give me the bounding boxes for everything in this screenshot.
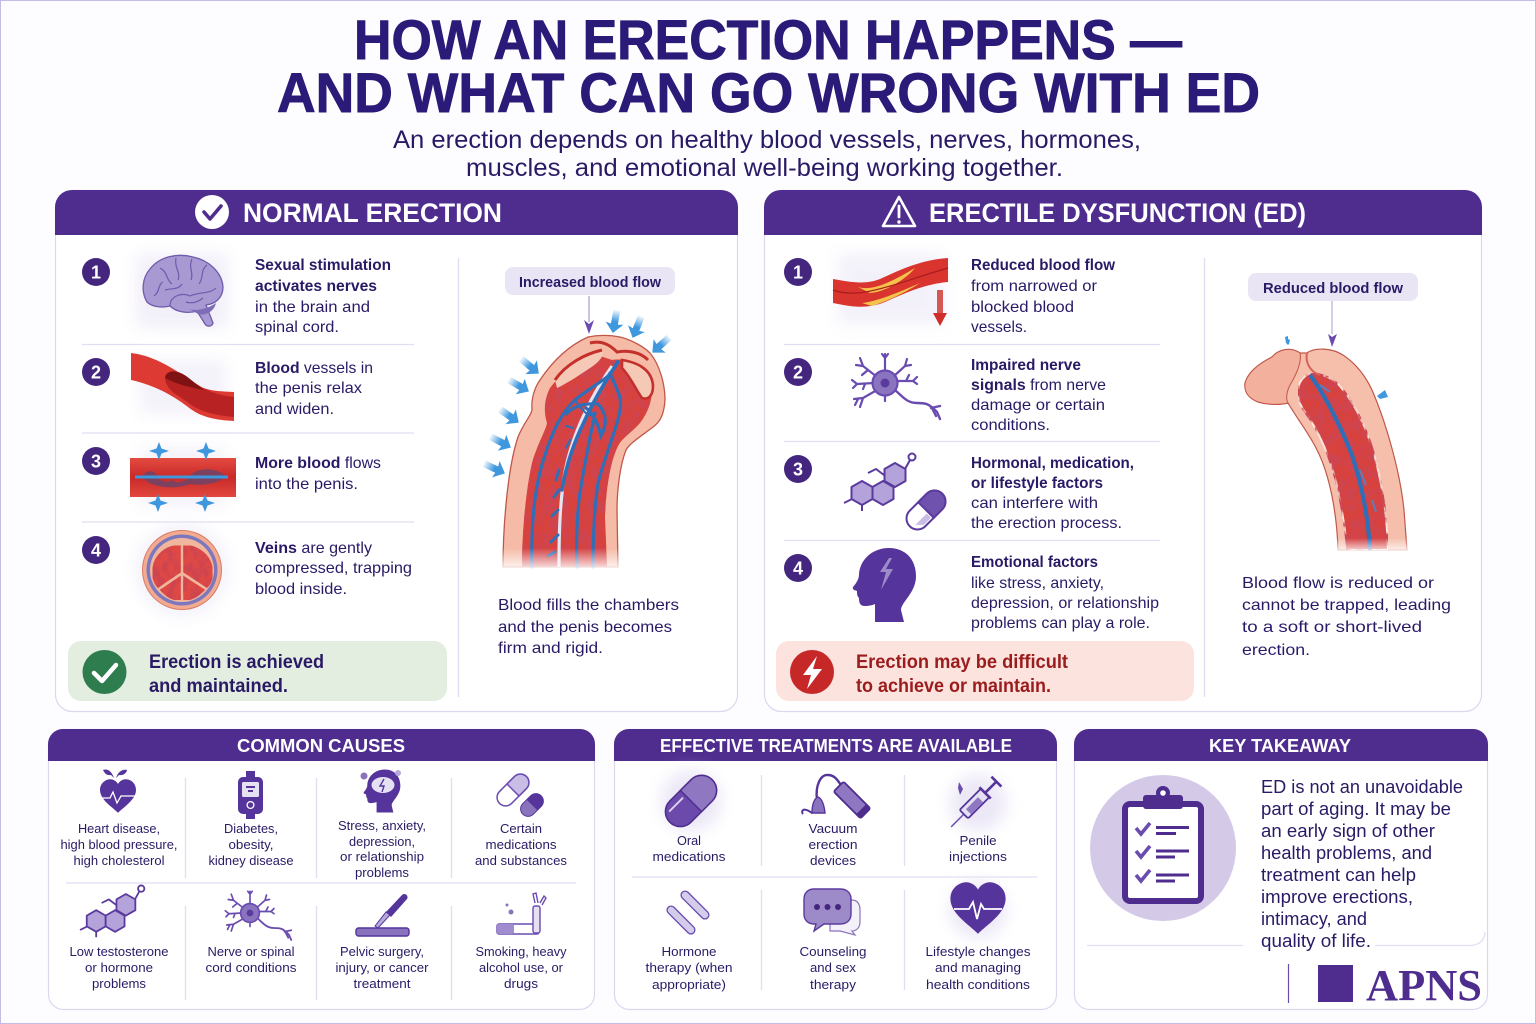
key takeaway text: part of aging. It may be (1261, 799, 1451, 819)
callout: erection difficult: Erection may be difficult (856, 652, 1069, 673)
panel header: ED: ERECTILE DYSFUNCTION (ED) (929, 198, 1306, 228)
cause: smoking and alcohol (476, 893, 567, 991)
title (277, 8, 1260, 124)
key takeaway text: treatment can help (1261, 865, 1416, 885)
arrows: sparse flow (1285, 301, 1388, 399)
caption: ED: erection. (1242, 642, 1310, 659)
step 4: cross-section: blood inside. (255, 581, 347, 598)
step 2: neuron (784, 354, 1106, 434)
callout: erection difficult (776, 641, 1194, 701)
logo: APNS (1288, 961, 1482, 1010)
treatment: lifestyle: health conditions (926, 978, 1030, 992)
cause: medications: and substances (475, 854, 567, 868)
label pill: reduced blood flow: Reduced blood flow (1263, 280, 1403, 297)
callout: erection difficult: to achieve or maintain. (856, 676, 1051, 697)
cause: smoking and alcohol: Smoking, heavy (476, 945, 567, 959)
step 2: widened vessel (82, 353, 373, 421)
cause: medications (475, 771, 567, 868)
step 2: neuron: signals from nerve (971, 377, 1106, 394)
label pill: increased blood flow: Increased blood flow (519, 274, 661, 291)
treatment: oral medications: medications (652, 850, 726, 864)
caption: ED: cannot be trapped, leading (1242, 597, 1451, 614)
cause: nerve conditions: cord conditions (206, 961, 296, 975)
treatment: oral medications: Oral (677, 834, 701, 848)
treatment: hormone therapy: Hormone (662, 945, 717, 959)
logo: APNS: APNS (1366, 961, 1482, 1010)
treatment: vacuum device: devices (810, 854, 856, 868)
step 4: head with stress bolt: problems can play a role. (971, 615, 1150, 632)
header: common causes: COMMON CAUSES (237, 735, 405, 756)
panel: erectile dysfunction (764, 190, 1482, 712)
cause: low testosterone (70, 885, 169, 991)
step 3: more blood flow: 3 (91, 452, 101, 472)
cause: smoking and alcohol: alcohol use, or (479, 961, 563, 975)
cause: smoking and alcohol: drugs (504, 977, 538, 991)
header: common causes (48, 729, 595, 761)
subtitle: muscles, and emotional well-being working together. (466, 154, 1063, 182)
cause: diabetes meter: Diabetes, (224, 822, 278, 836)
step 3: hormone and capsule (784, 454, 1134, 534)
step 1: narrowed vessel: from narrowed or (971, 278, 1098, 295)
callout: erection achieved: and maintained. (149, 676, 288, 697)
treatment: lifestyle: Lifestyle changes (926, 945, 1030, 959)
step 3: hormone and capsule: the erection process. (971, 515, 1122, 532)
step 1: narrowed vessel: vessels. (971, 319, 1027, 336)
step 2: widened vessel: the penis relax (255, 380, 362, 397)
cause: diabetes meter: kidney disease (208, 854, 294, 868)
step 1: brain: Sexual stimulation (255, 257, 391, 274)
cause: stress head: depression, (349, 835, 415, 849)
treatment: vacuum device: erection (808, 838, 858, 852)
key takeaway text: intimacy, and (1261, 909, 1367, 929)
treatment: vacuum device: Vacuum (808, 822, 858, 836)
panel header: normal erection (55, 190, 738, 235)
caption: normal: firm and rigid. (498, 640, 603, 657)
step 3: hormone and capsule: or lifestyle factors (971, 475, 1103, 492)
step 4: head with stress bolt: depression, or relationship (971, 595, 1159, 612)
step 4: cross-section: Veins are gently (255, 540, 372, 557)
cause: medications: Certain (500, 822, 542, 836)
cause: heart disease (60, 769, 178, 868)
step 4: cross-section: compressed, trapping (255, 560, 412, 577)
step 4: cross-section (82, 524, 412, 616)
panel header: ED (764, 190, 1482, 235)
caption: ED (1242, 575, 1451, 659)
cause: nerve conditions: Nerve or spinal (208, 945, 294, 959)
header: treatments: EFFECTIVE TREATMENTS ARE AVAILABLE (660, 735, 1012, 756)
step 1: brain: activates nerves (255, 278, 377, 295)
step 2: widened vessel: and widen. (255, 401, 334, 418)
illustration: anatomy with reduced flow (1245, 349, 1412, 554)
treatment: vacuum device (802, 775, 870, 868)
subtitle (393, 126, 1141, 182)
key takeaway text (1261, 777, 1463, 951)
illustration: normal anatomy with increased flow (498, 336, 665, 572)
key takeaway text: improve erections, (1261, 887, 1413, 907)
step 1: brain: in the brain and (255, 299, 370, 316)
cause: stress head: Stress, anxiety, (338, 819, 426, 833)
cause: pelvic surgery: treatment (354, 977, 411, 991)
cause: nerve conditions (206, 891, 296, 975)
cause: medications: medications (486, 838, 556, 852)
step 4: head with stress bolt: 4 (793, 558, 803, 578)
subtitle: An erection depends on healthy blood vessels, nerves, hormones, (393, 126, 1141, 154)
step 3: hormone and capsule: can interfere with (971, 495, 1098, 512)
step 1: narrowed vessel: Reduced blood flow (971, 257, 1116, 274)
panel: common causes (48, 729, 595, 1010)
treatment: injections: injections (949, 850, 1007, 864)
treatment: hormone therapy: therapy (when (646, 961, 733, 975)
cause: pelvic surgery: injury, or cancer (336, 961, 428, 975)
step 3: more blood flow (82, 442, 381, 512)
cause: heart disease: high cholesterol (74, 854, 164, 868)
key takeaway text: health problems, and (1261, 843, 1432, 863)
caption: normal: Blood fills the chambers (498, 597, 679, 614)
step 2: neuron: Impaired nerve (971, 357, 1081, 374)
header: key takeaway (1074, 729, 1488, 761)
cause: diabetes meter (208, 771, 294, 868)
caption: ED: to a soft or short-lived (1242, 619, 1422, 636)
caption: normal (498, 597, 679, 657)
caption: normal: and the penis becomes (498, 619, 672, 636)
treatment: injections (945, 775, 1007, 864)
panel: key takeaway (1074, 729, 1488, 1010)
panel: normal erection (55, 190, 738, 712)
title: AND WHAT CAN GO WRONG WITH ED (277, 61, 1260, 124)
label pill: reduced blood flow (1248, 273, 1418, 301)
header: key takeaway: KEY TAKEAWAY (1209, 735, 1352, 756)
header: treatments (614, 729, 1057, 761)
cause: pelvic surgery (336, 894, 428, 991)
treatment: counseling: Counseling (800, 945, 867, 959)
step 1: brain: spinal cord. (255, 319, 339, 336)
arrows: incoming blood flow (480, 296, 675, 482)
caption: ED: Blood flow is reduced or (1242, 575, 1435, 592)
step 2: neuron: damage or certain (971, 397, 1105, 414)
cause: low testosterone: Low testosterone (70, 945, 169, 959)
cause: low testosterone: or hormone (85, 961, 153, 975)
step 4: head with stress bolt: Emotional factors (971, 554, 1098, 571)
step 1: narrowed vessel: 1 (793, 262, 803, 282)
step 2: neuron: 2 (793, 362, 803, 382)
step 1: brain (82, 254, 391, 336)
treatment: lifestyle: and managing (935, 961, 1021, 975)
step 2: widened vessel: 2 (91, 362, 101, 382)
treatment: counseling: and sex (810, 961, 857, 975)
step 4: head with stress bolt: like stress, anxiety, (971, 575, 1104, 592)
cause: diabetes meter: obesity, (228, 838, 274, 852)
cause: heart disease: high blood pressure, (60, 838, 178, 852)
callout: erection achieved (68, 641, 447, 701)
treatment: counseling: therapy (810, 978, 857, 992)
cause: pelvic surgery: Pelvic surgery, (340, 945, 424, 959)
step 1: narrowed vessel (784, 254, 1116, 336)
cause: stress head: or relationship (340, 850, 424, 864)
icon: clipboard (1090, 775, 1236, 921)
treatment: oral medications (652, 769, 726, 864)
step 4: cross-section: 4 (91, 540, 101, 560)
treatment: hormone therapy (646, 889, 733, 992)
treatment: injections: Penile (960, 834, 997, 848)
treatment: hormone therapy: appropriate) (652, 978, 726, 992)
step 4: head with stress bolt (784, 548, 1159, 632)
step 1: narrowed vessel: blocked blood (971, 299, 1074, 316)
key takeaway text: quality of life. (1261, 931, 1371, 951)
treatment: lifestyle (926, 882, 1030, 992)
title: HOW AN ERECTION HAPPENS — (354, 8, 1182, 71)
step 2: widened vessel: Blood vessels in (255, 360, 373, 377)
callout: erection achieved: Erection is achieved (149, 652, 324, 673)
cause: low testosterone: problems (92, 977, 146, 991)
cause: stress head: problems (355, 866, 409, 880)
key takeaway text: an early sign of other (1261, 821, 1435, 841)
treatment: counseling (800, 889, 867, 992)
key takeaway text: ED is not an unavoidable (1261, 777, 1463, 797)
step 2: neuron: conditions. (971, 417, 1050, 434)
cause: stress head (338, 770, 426, 880)
step 3: hormone and capsule: 3 (793, 460, 803, 480)
step 3: more blood flow: More blood flows (255, 455, 381, 472)
step 1: brain: 1 (91, 262, 101, 282)
step 3: more blood flow: into the penis. (255, 476, 358, 493)
label pill: increased blood flow (505, 267, 675, 295)
cause: heart disease: Heart disease, (78, 822, 160, 836)
panel: treatments (614, 729, 1057, 1010)
step 3: hormone and capsule: Hormonal, medication, (971, 455, 1134, 472)
panel header: normal erection: NORMAL ERECTION (243, 198, 502, 228)
